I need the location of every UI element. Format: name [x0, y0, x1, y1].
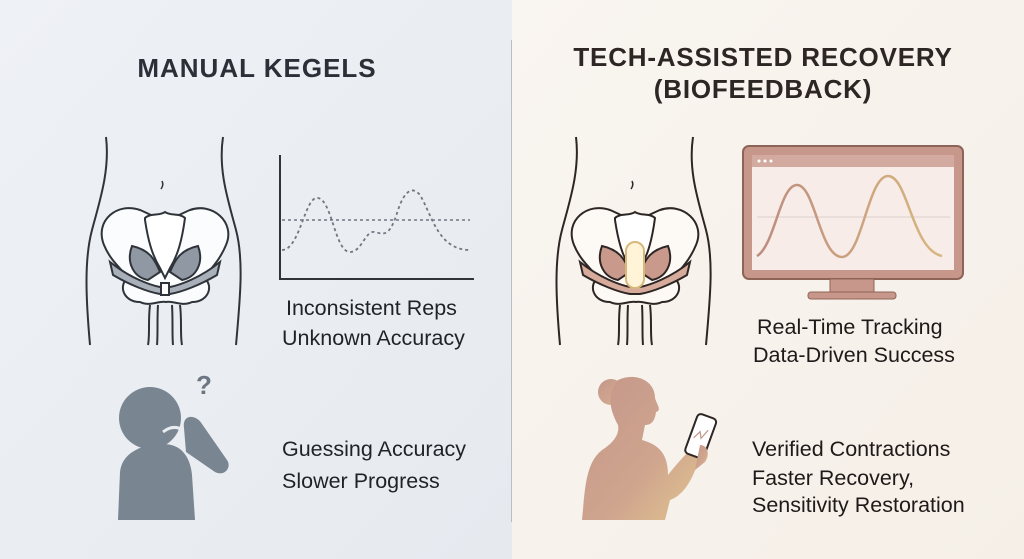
text: verified contractions: Faster Recovery, [752, 466, 914, 490]
text: inconsistent reps: Inconsistent Reps [286, 296, 457, 320]
icon: monitor with waveform [743, 146, 963, 299]
title: tech-assisted recovery: (BIOFEEDBACK) [654, 74, 872, 104]
text: real-time tracking [753, 315, 955, 367]
text: verified contractions: Verified Contractions [752, 437, 950, 461]
text: real-time tracking: Data-Driven Success [753, 343, 955, 367]
text: inconsistent reps: Unknown Accuracy [282, 326, 465, 350]
icon: woman with phone [582, 377, 717, 520]
icon: pelvis manual [86, 137, 241, 345]
title: tech-assisted recovery: TECH-ASSISTED RECOVERY [573, 42, 953, 72]
text: verified contractions: Sensitivity Restoration [752, 493, 965, 517]
chart: inconsistent reps [280, 155, 474, 279]
text: real-time tracking: Real-Time Tracking [757, 315, 943, 339]
text: guessing accuracy: Slower Progress [282, 469, 440, 493]
title: tech-assisted recovery [573, 42, 953, 104]
icon: confused person: ? [196, 370, 212, 400]
icon: confused person [118, 370, 229, 520]
text: guessing accuracy [282, 437, 466, 493]
title: manual kegels: MANUAL KEGELS [137, 53, 377, 83]
text: guessing accuracy: Guessing Accuracy [282, 437, 466, 461]
text: verified contractions [752, 437, 965, 517]
text: inconsistent reps [282, 296, 465, 350]
icon: pelvis biofeedback [556, 137, 711, 345]
